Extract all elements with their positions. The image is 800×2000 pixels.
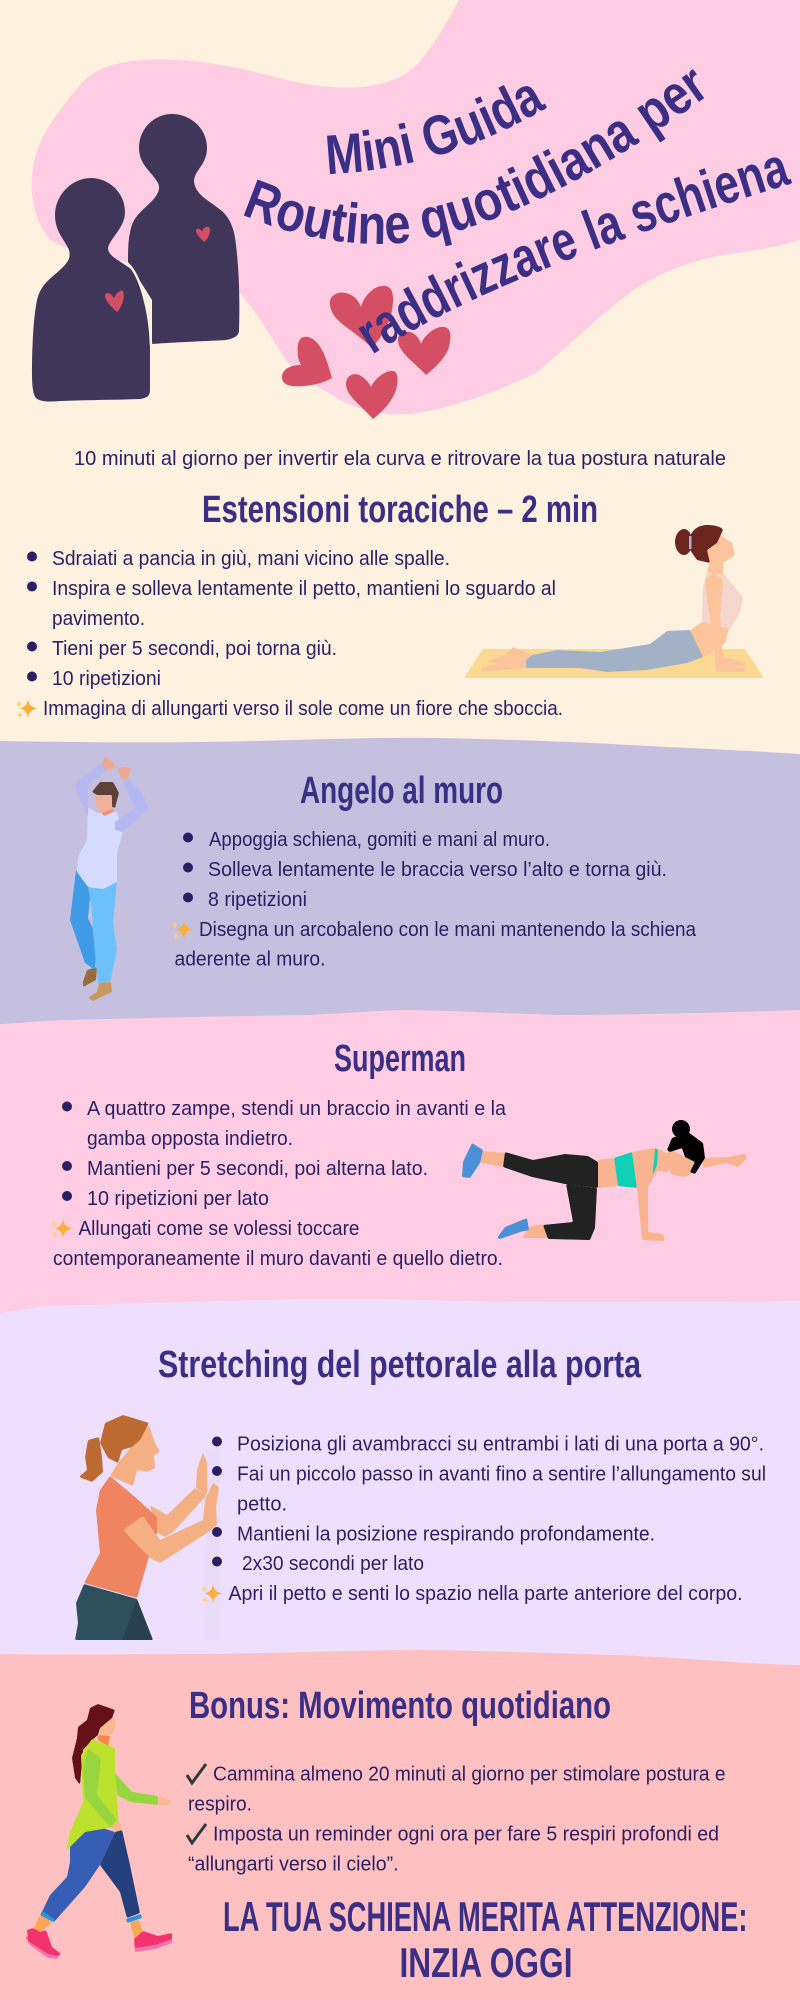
illustration: man at wall (70, 757, 149, 1001)
bullet list: 8 ripetizioni (208, 889, 307, 911)
bullet list: Sdraiati a pancia in giù, mani vicino alle spalle. (52, 548, 450, 570)
tip: aderente al muro. (174, 948, 326, 970)
tip (174, 919, 697, 970)
silhouette outline (128, 264, 151, 345)
back silhouette (128, 114, 239, 344)
bullet list: Inspira e solleva lentamente il petto, mantieni lo sguardo al (52, 578, 556, 600)
panel: stretching del pettorale (0, 1299, 800, 1670)
front silhouette heart (105, 291, 124, 312)
bullet list (183, 829, 667, 911)
tip: Immagina di allungarti verso il sole come un fiore che sboccia. (43, 698, 563, 720)
tip: Apri il petto e senti lo spazio nella parte anteriore del corpo. (228, 1583, 742, 1605)
bonus item one: respiro. (188, 1794, 252, 1816)
bullet list (212, 1434, 766, 1575)
heading: Bonus: Movimento quotidiano (189, 1685, 611, 1727)
illustration: bird-dog pose (462, 1120, 747, 1241)
bullet list: Posiziona gli avambracci su entrambi i lati di una porta a 90°. (237, 1434, 764, 1456)
illustration: door stretch (75, 1415, 220, 1640)
heading: Superman (334, 1038, 466, 1080)
title (244, 69, 792, 354)
panel: estensioni toraciche (16, 489, 764, 720)
bullet list: 10 ripetizioni per lato (87, 1188, 269, 1210)
band background (0, 1650, 800, 2000)
icon: check (187, 1824, 206, 1843)
tip (53, 1218, 503, 1270)
bullet list: petto. (237, 1494, 287, 1516)
bullet list: Fai un piccolo passo in avanti fino a sentire l’allungamento sul (237, 1464, 766, 1486)
subtitle: 10 minuti al giorno per invertir ela curva e ritrovare la tua postura naturale (74, 448, 726, 470)
title: Mini Guida (327, 85, 547, 174)
panel: angelo al muro (0, 738, 800, 1030)
bullet list: gamba opposta indietro. (87, 1128, 293, 1150)
band background (0, 738, 800, 1030)
bullet list: Mantieni per 5 secondi, poi alterna lato. (87, 1158, 428, 1180)
bullet list: Tieni per 5 secondi, poi torna giù. (52, 638, 337, 660)
front silhouette (32, 178, 150, 402)
title: Routine quotidiana per (244, 69, 704, 246)
illustration: walking woman (24, 1704, 172, 1959)
bonus item two: Imposta un reminder ogni ora per fare 5 respiri profondi ed (213, 1824, 719, 1846)
icon: check (187, 1764, 206, 1783)
heading: Estensioni toraciche – 2 min (202, 489, 598, 531)
illustration: cobra pose (464, 525, 764, 678)
panel: bonus (0, 1650, 800, 2000)
bullet list: Appoggia schiena, gomiti e mani al muro. (209, 829, 550, 851)
bullet list: 2x30 secondi per lato (242, 1553, 424, 1575)
large hearts (282, 286, 450, 419)
bonus item two (188, 1824, 719, 1876)
tip: Allungati come se volessi toccare (78, 1218, 360, 1240)
bonus item one: Cammina almeno 20 minuti al giorno per stimolare postura e (213, 1764, 726, 1786)
bonus item two: “allungarti verso il cielo”. (188, 1854, 398, 1876)
band background (0, 1299, 800, 1670)
heading: Angelo al muro (300, 770, 503, 812)
icon: sparkle (172, 920, 193, 939)
back silhouette heart (196, 227, 210, 242)
heading: Stretching del pettorale alla porta (158, 1344, 642, 1386)
bullet list: Solleva lentamente le braccia verso l’alto e torna giù. (208, 859, 667, 881)
icon: sparkle (51, 1219, 72, 1238)
pink background blob (32, 0, 800, 414)
tip: Disegna un arcobaleno con le mani mantenendo la schiena (199, 919, 697, 941)
title: raddrizzare la schiena (358, 158, 792, 354)
bullet list: pavimento. (52, 608, 145, 630)
bullet list: Mantieni la posizione respirando profondamente. (237, 1524, 655, 1546)
icon: sparkle (201, 1584, 222, 1603)
icon: sparkle (16, 699, 37, 718)
bullet list: 10 ripetizioni (52, 668, 161, 690)
closing call to action (223, 1893, 748, 1986)
band background (0, 1010, 800, 1320)
bullet list (62, 1098, 507, 1210)
tip: contemporaneamente il muro davanti e quello dietro. (53, 1248, 503, 1270)
closing call to action: INZIA OGGI (400, 1939, 572, 1986)
header section (32, 0, 800, 470)
bullet list (27, 548, 556, 690)
bonus item one (188, 1764, 726, 1816)
panel: superman (0, 1010, 800, 1320)
bullet list: A quattro zampe, stendi un braccio in avanti e la (87, 1098, 507, 1120)
